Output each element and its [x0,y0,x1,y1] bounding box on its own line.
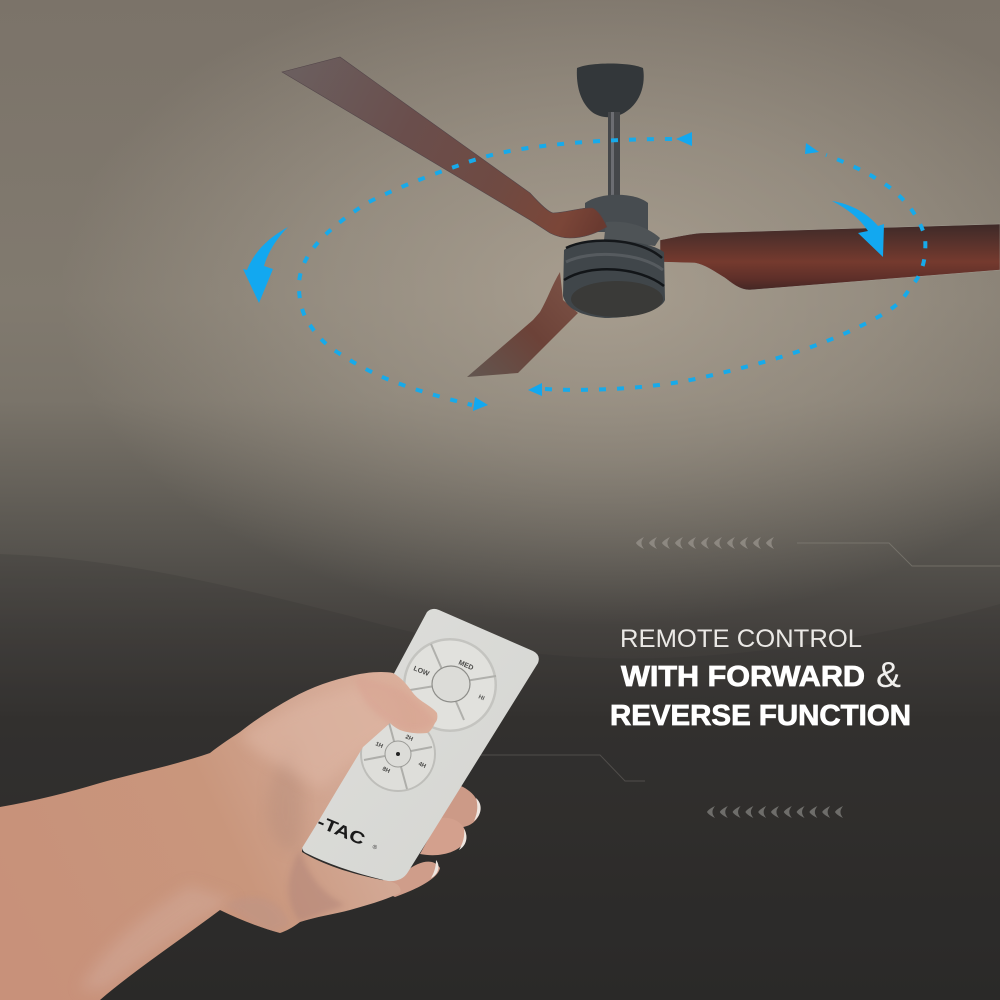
rotation path: dashed ellipse [299,139,925,405]
brand logo: -TAC [314,812,368,849]
fan blade: left [282,57,607,238]
fingers behind remote [370,784,479,897]
timer buttons: 4H [417,761,427,770]
speed buttons: HI [477,694,485,702]
headline line 2: WITH FORWARD [621,661,865,693]
registered mark: ® [371,843,379,852]
headline text [610,625,911,732]
speed buttons: LOW [412,665,430,678]
timer buttons: 8H [381,766,391,775]
rotation arrowheads [473,132,819,411]
timer buttons: 1H [374,741,384,750]
fan blade: lower [467,272,578,377]
motor housing [563,240,665,318]
speed buttons [403,638,497,732]
motor upper body [585,195,660,246]
remote control [302,609,539,881]
headline line 3: REVERSE FUNCTION [610,700,911,732]
fan blade: right [660,224,1000,290]
ceiling fan [282,57,1000,377]
headline line 1: REMOTE CONTROL [620,625,862,653]
speed buttons: MED [457,659,474,672]
curved arrow: left [243,227,288,303]
hand holding remote [0,609,539,1000]
decorative chevrons and circuit lines [480,537,1000,818]
curved arrow: right [832,201,884,257]
hand and arm [0,660,450,1000]
timer buttons [360,716,436,792]
fingernails [431,798,481,878]
timer buttons: 2H [404,734,414,743]
ampersand: & [876,654,901,695]
arm shading [86,700,428,989]
canopy and downrod [577,64,644,200]
